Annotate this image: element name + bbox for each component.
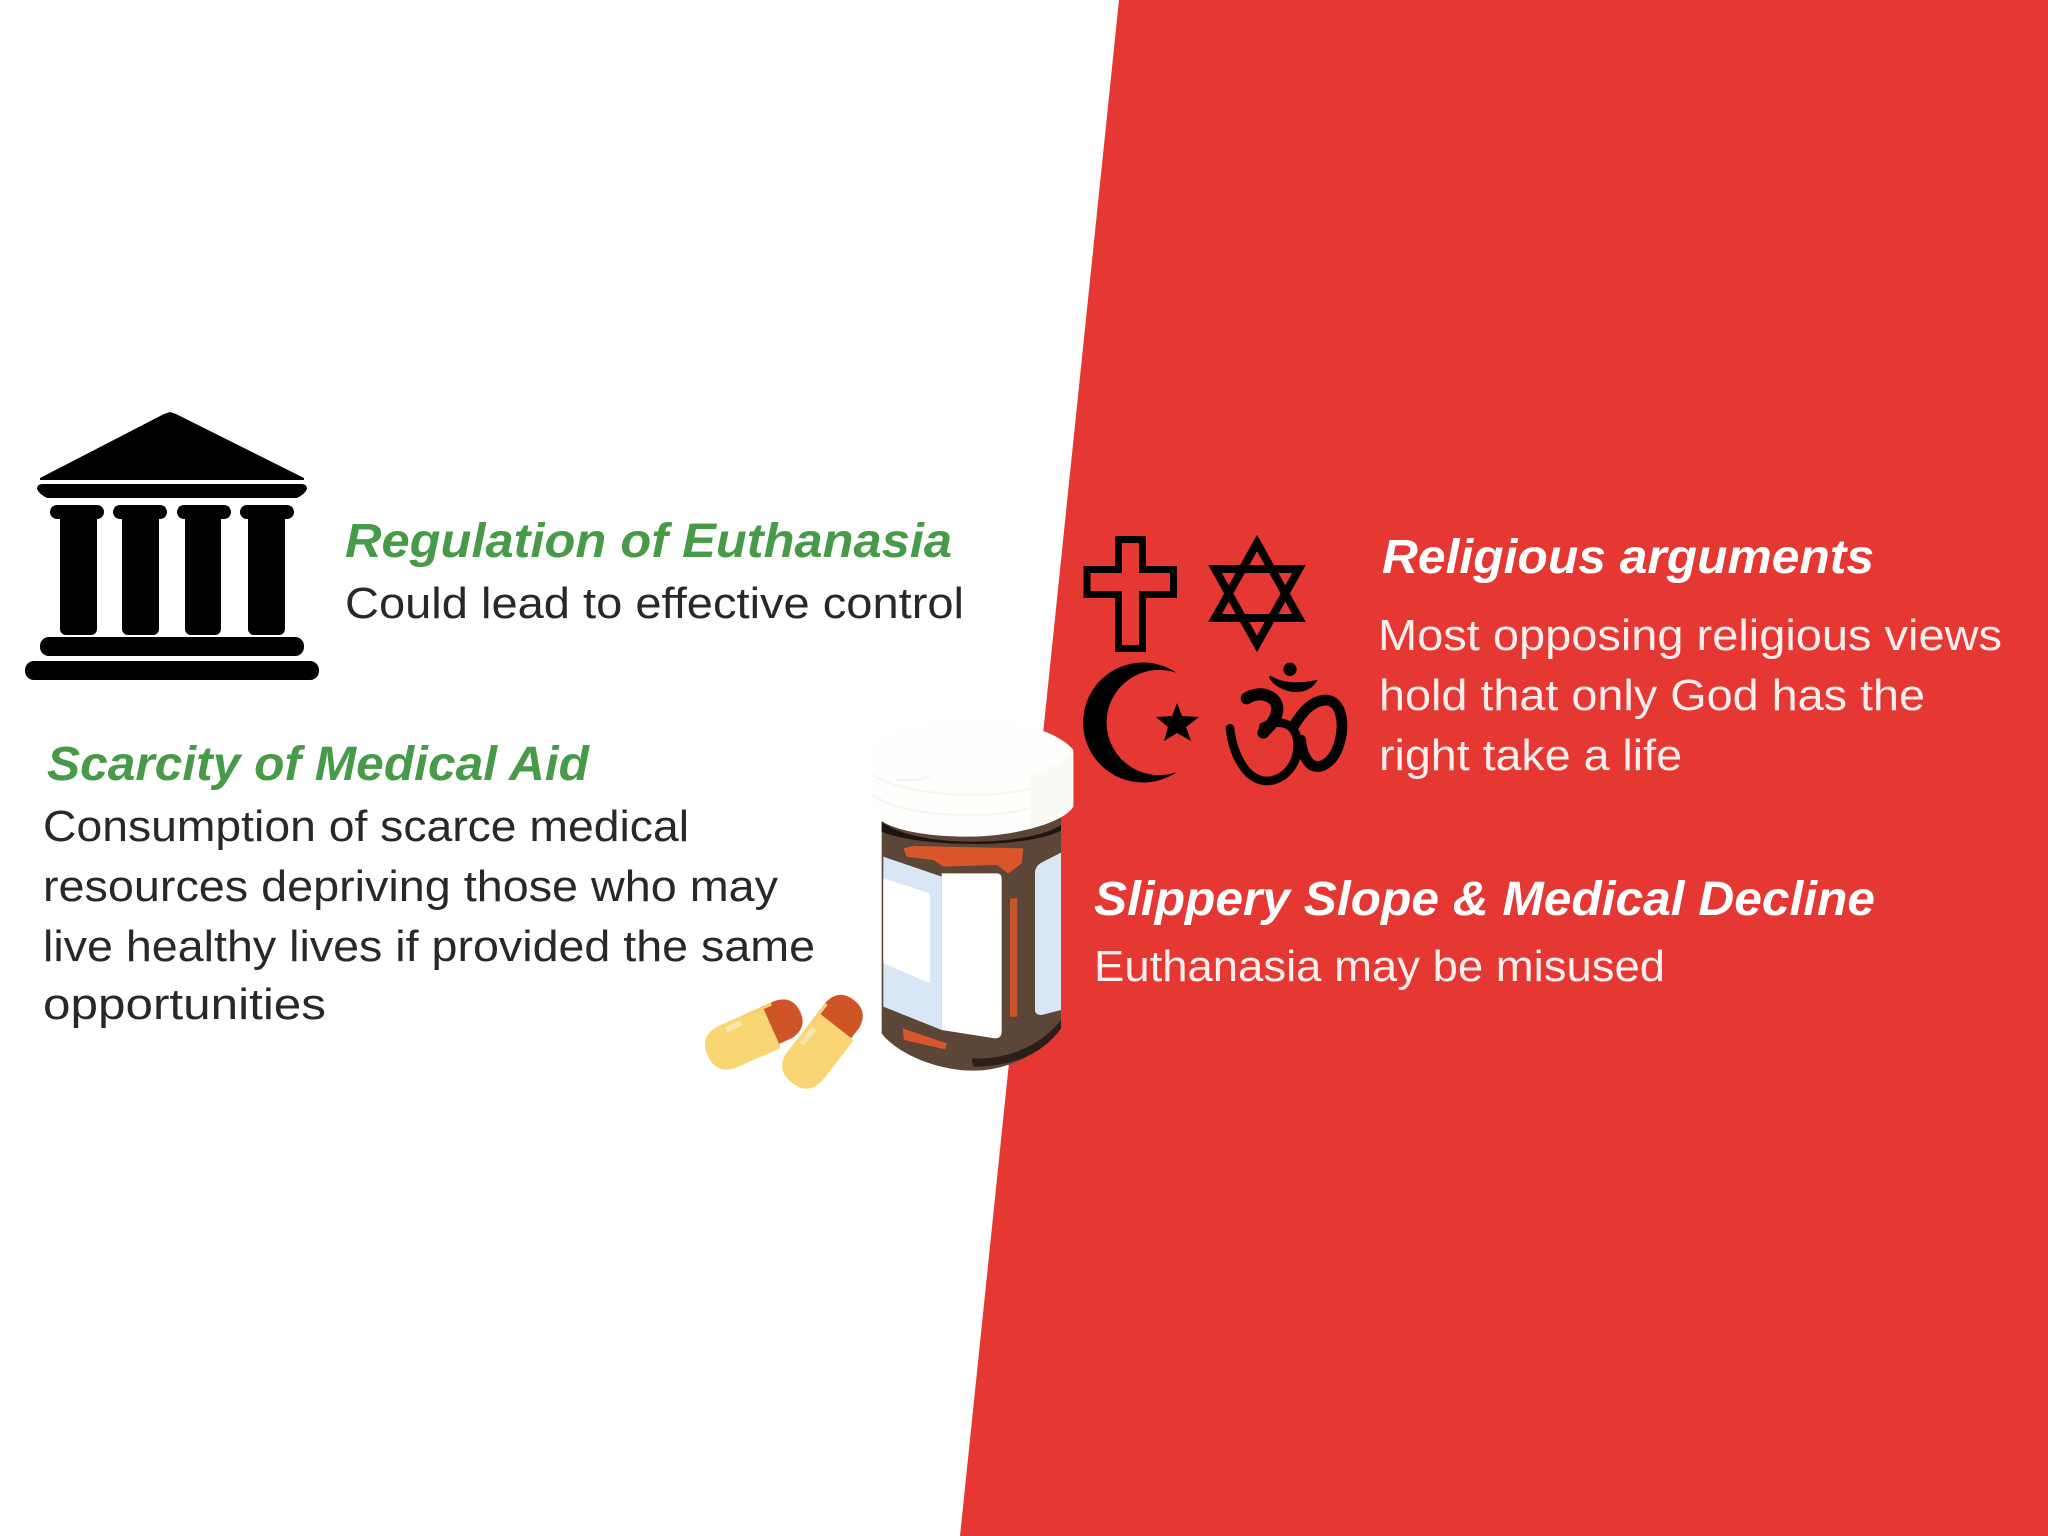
heading: Regulation of Euthanasia: Regulation of Euthanasia [345,515,952,568]
icon: cross [1087,540,1174,648]
icon: crescent and star [1083,663,1199,783]
pill 1 [698,993,810,1076]
text: religious body: right take a life [1379,731,1682,780]
bottle body [882,810,1061,1071]
icon: star of David [1215,543,1299,644]
text: religious body: Most opposing religious views [1378,611,2002,660]
pill 2 [774,987,873,1097]
bottle label [883,857,942,1030]
text: scarcity body: live healthy lives if provided the same [43,922,815,971]
icon: government building [25,412,319,680]
icon: om symbol [1230,663,1342,781]
bottle cap [872,720,1073,837]
text: religious body: hold that only God has the [1379,671,1925,720]
text: scarcity body: Consumption of scarce medical [43,802,689,851]
text: slippery slope body: Euthanasia may be misused [1094,942,1665,991]
panel: red background [960,0,2048,1536]
text: scarcity body: opportunities [43,980,326,1029]
text: religious body [1378,611,2002,780]
text: scarcity body [43,802,815,1029]
text: scarcity body: resources depriving those who may [43,862,778,911]
heading: Scarcity of Medical Aid: Scarcity of Medical Aid [47,738,591,791]
heading: Religious arguments: Religious arguments [1382,531,1874,584]
text: regulation body: Could lead to effective control [345,579,964,628]
icon: medicine bottle and pills [698,720,1073,1097]
heading: Slippery Slope & Medical Decline: Slippery Slope & Medical Decline [1094,873,1875,926]
